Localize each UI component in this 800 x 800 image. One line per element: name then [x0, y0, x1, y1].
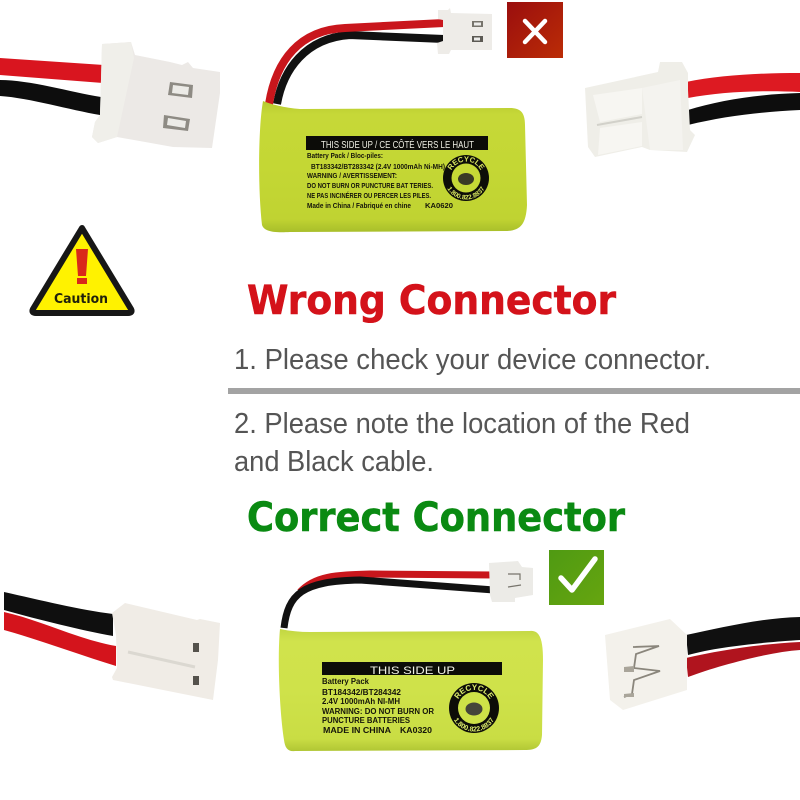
heading: correct connector: Correct Connector	[247, 495, 625, 541]
top plug, wrong	[437, 8, 492, 54]
wrong battery with top connector	[259, 8, 527, 232]
black side-up band, wrong	[306, 136, 488, 150]
label text, wrong battery: NE PAS INCINÉRER OU PERCER LES PILES.	[307, 191, 431, 200]
label text, wrong battery: THIS SIDE UP / CE CÔTÉ VERS LE HAUT	[321, 138, 474, 151]
label text, wrong battery	[307, 138, 474, 210]
recycle seal, wrong battery: RECYCLE	[447, 156, 485, 170]
correct connector close-up, left	[4, 592, 220, 700]
label text, correct battery: MADE IN CHINA	[323, 726, 391, 735]
label text, wrong battery: WARNING / AVERTISSEMENT:	[307, 171, 397, 180]
label text, correct battery: 2.4V 1000mAh NI-MH	[322, 697, 400, 706]
correct battery with top connector	[278, 561, 543, 752]
icon: red X badge	[507, 2, 563, 58]
label text, correct battery: PUNCTURE BATTERIES	[322, 716, 411, 725]
label text, wrong battery: Battery Pack / Bloc-piles:	[307, 151, 383, 160]
heading: wrong connector: Wrong Connector	[247, 278, 616, 324]
icon: caution triangle	[32, 228, 132, 313]
correct connector close-up, right	[605, 617, 800, 710]
instruction 2	[234, 408, 690, 478]
battery body, wrong	[259, 101, 527, 232]
label text, wrong battery: Made in China / Fabriqué en chine	[307, 201, 411, 210]
label text, wrong battery: DO NOT BURN OR PUNCTURE BAT TERIES.	[307, 181, 433, 190]
wrong connector close-up, left	[0, 42, 220, 148]
exclamation mark	[76, 249, 88, 284]
instruction 1: 1. Please check your device connector.	[234, 344, 711, 376]
top plug, correct	[489, 561, 533, 602]
label text, wrong battery: KA0620	[425, 201, 453, 210]
label text, correct battery: THIS SIDE UP	[370, 665, 455, 677]
wrong connector close-up, right	[585, 62, 800, 157]
label text, wrong battery: BT183342/BT283342 (2.4V 1000mAh Ni-MH)	[311, 162, 445, 171]
icon: green check badge	[549, 550, 604, 605]
label text, correct battery: Battery Pack	[322, 677, 370, 686]
label text, correct battery: WARNING: DO NOT BURN OR	[322, 707, 434, 716]
instruction 2: and Black cable.	[234, 446, 434, 478]
label text, correct battery: KA0320	[400, 726, 433, 735]
battery body, correct	[279, 629, 543, 751]
label text, correct battery: BT184342/BT284342	[322, 688, 402, 697]
recycle seal, wrong battery	[443, 155, 489, 201]
caution word: Caution	[54, 291, 108, 307]
label text, correct battery	[322, 665, 455, 735]
recycle seal, correct battery	[449, 683, 499, 733]
recycle seal, correct battery: 1.800.822.8837	[454, 717, 494, 732]
recycle seal, wrong battery: 1.800.822.8837	[447, 186, 484, 200]
black side-up band, correct	[322, 662, 502, 675]
recycle seal, correct battery: RECYCLE	[454, 684, 494, 699]
instruction 2: 2. Please note the location of the Red	[234, 408, 690, 440]
